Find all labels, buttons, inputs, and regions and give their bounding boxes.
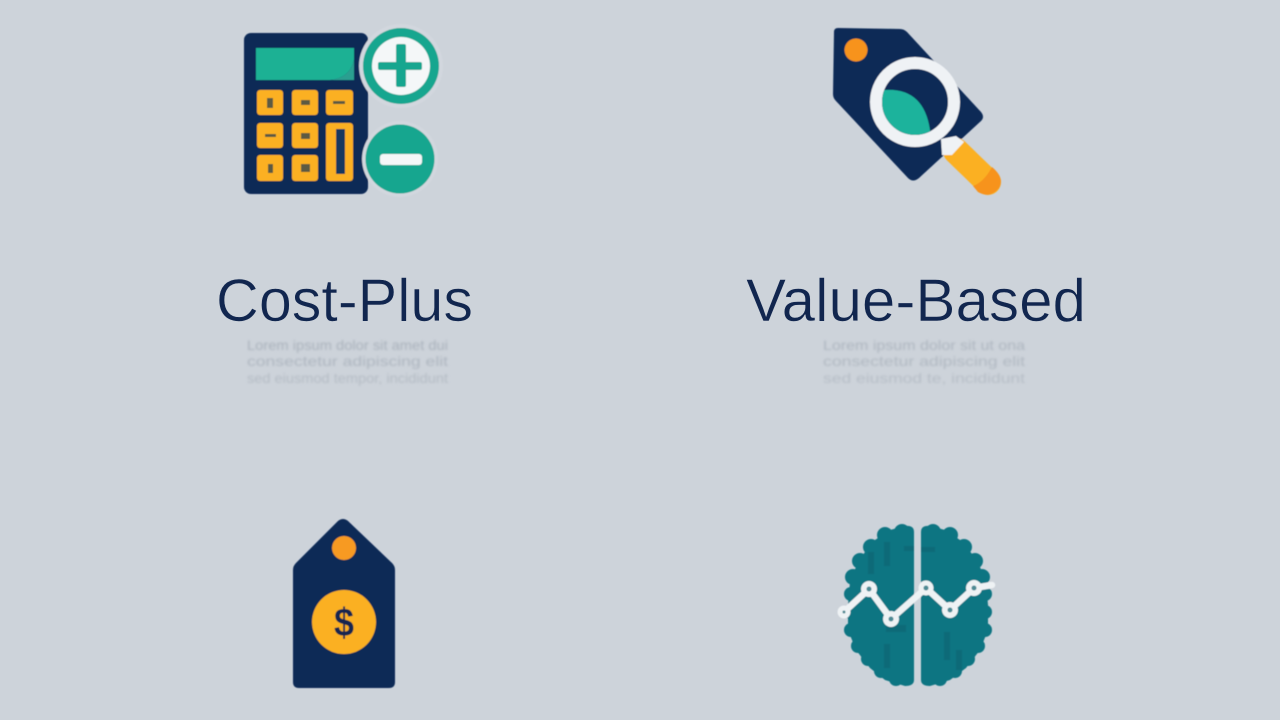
- panel: Value-Based: [746, 28, 1086, 386]
- text block: Value-Based description: [823, 337, 1025, 386]
- panel: price tag: [293, 519, 395, 688]
- text block: Value-Based description: sed eiusmod te, incididunt: [823, 370, 1025, 386]
- dollar sign: $: [334, 601, 354, 645]
- left hemisphere: [844, 524, 914, 686]
- trend line: [838, 580, 992, 627]
- panel: Cost-Plus: [216, 24, 473, 386]
- right hemisphere: [921, 524, 992, 686]
- icon: dollar price tag: [293, 519, 395, 688]
- text block: Value-Based description: Lorem ipsum dolor sit ut ona: [823, 337, 1025, 353]
- heading: Value-Based: Value-Based: [746, 267, 1086, 334]
- panel: brain: [838, 524, 992, 686]
- text block: Cost-Plus description: consectetur adipiscing elit: [247, 353, 448, 369]
- icon: brain with trend line: [838, 524, 992, 686]
- text block: Cost-Plus description: Lorem ipsum dolor sit amet dui: [247, 337, 448, 353]
- infographic canvas: [219, 27, 1082, 689]
- heading: Cost-Plus: Cost-Plus: [216, 267, 473, 334]
- icon: calculator with plus and minus: [244, 24, 443, 197]
- icon: price tag with magnifying glass: [833, 28, 1001, 195]
- text block: Cost-Plus description: sed eiusmod tempor, incididunt: [247, 370, 448, 386]
- text block: Value-Based description: consectetur adipiscing elit: [823, 353, 1025, 369]
- text block: Cost-Plus description: [247, 337, 448, 386]
